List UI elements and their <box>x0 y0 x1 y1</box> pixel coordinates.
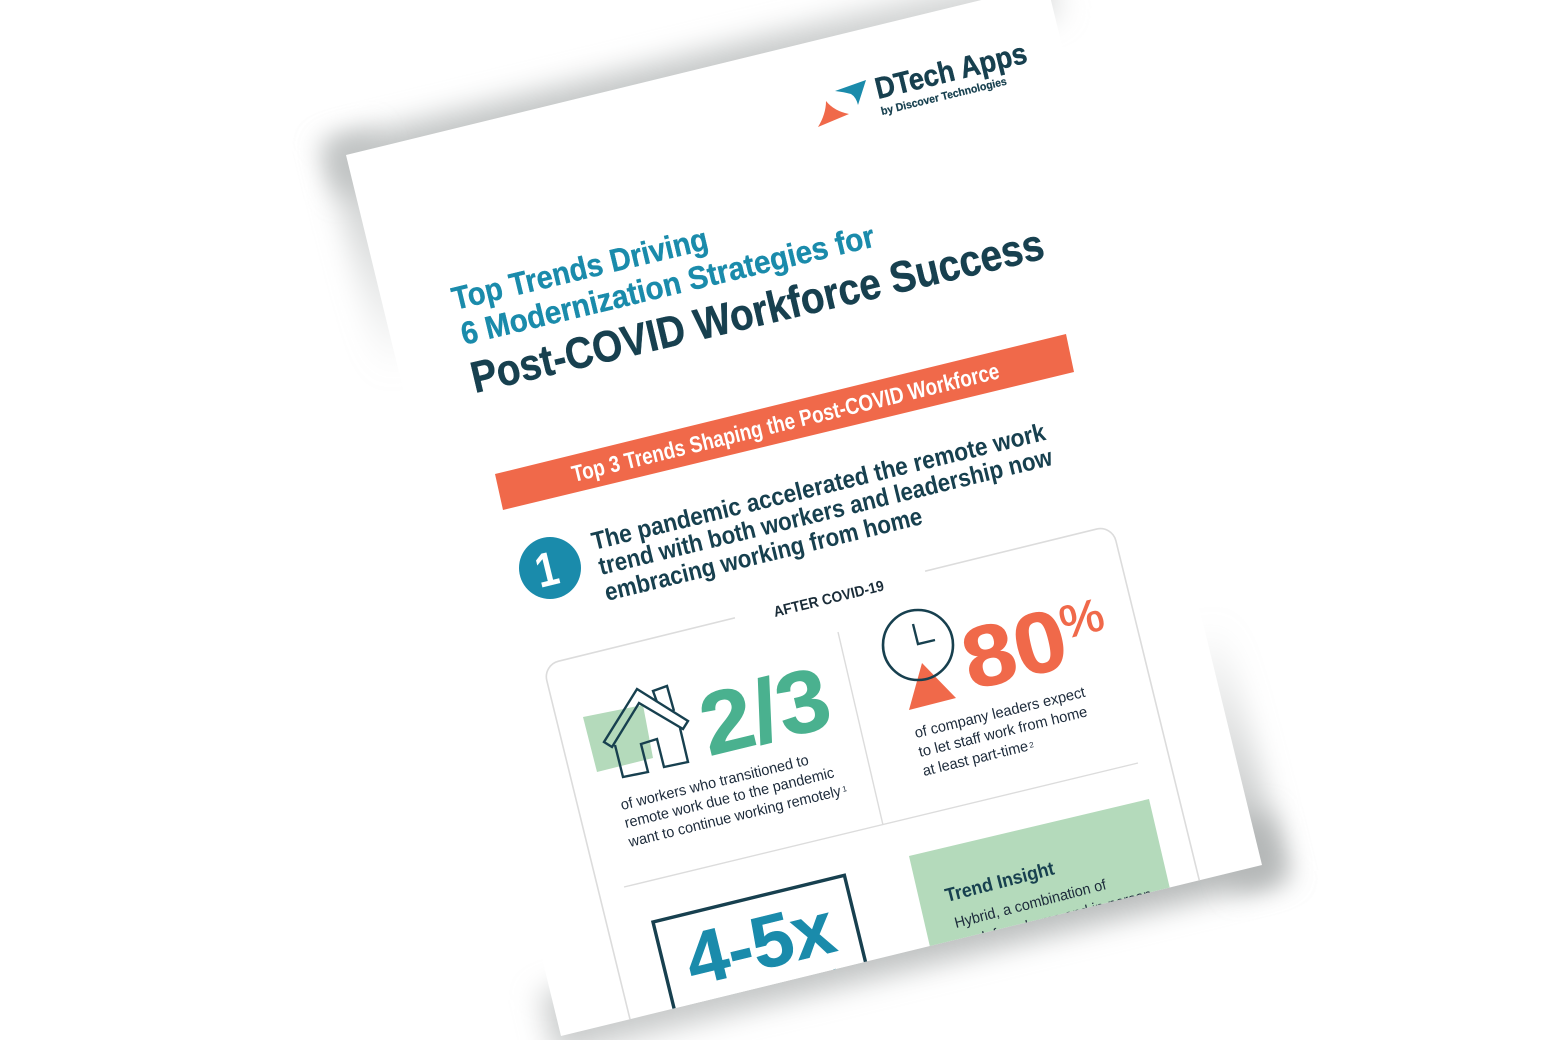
big number 4-5x: 4-5x <box>677 885 843 1002</box>
icon: house on green square <box>583 686 688 777</box>
callout text: Hybrid, a combination of <box>953 876 1109 932</box>
callout: trend insight <box>909 799 1170 946</box>
banner heading: Top 3 Trends Shaping the Post-COVID Workforce <box>569 358 1002 487</box>
big number 80: 80 <box>953 591 1077 708</box>
stat description: 2 <box>1028 740 1035 750</box>
stat description: want to continue working remotely <box>626 783 843 851</box>
stat: eighty percent <box>883 588 1109 780</box>
document sheet <box>346 0 1262 1036</box>
trend statement: The pandemic accelerated the remote work <box>589 418 1048 556</box>
title <box>450 229 1044 393</box>
stat: two thirds <box>583 670 847 846</box>
percent sign: % <box>1054 588 1109 649</box>
stat description: to let staff work from home <box>917 703 1089 761</box>
big number 2/3: 2/3 <box>690 647 840 774</box>
icon: logo orange arrow <box>818 101 849 127</box>
stat description: remote work due to the pandemic <box>623 764 836 832</box>
stat description: of company leaders expect <box>913 684 1088 742</box>
icon: clock with triangle <box>883 610 956 710</box>
trend statement: embracing working from home <box>602 502 925 607</box>
stat description: of workers who transitioned to <box>619 752 810 814</box>
logo: DTech Apps <box>818 48 1027 127</box>
icon: logo teal arrow <box>835 80 866 105</box>
sheet content clipped to page <box>448 37 1255 1040</box>
logo tagline: by Discover Technologies <box>880 76 1008 118</box>
panel outline <box>546 528 1200 1020</box>
stat description <box>915 688 1087 776</box>
number badge <box>519 537 581 599</box>
stat description: at least part-time <box>921 738 1030 780</box>
trend statement: trend with both workers and leadership now <box>596 443 1056 581</box>
number badge: 1 <box>530 542 564 599</box>
sheet drop shadows <box>325 0 1286 1040</box>
stat description: 1 <box>841 784 848 794</box>
title line 2: 6 Modernization Strategies for <box>457 218 878 352</box>
logo wordmark: DTech Apps <box>872 37 1030 106</box>
stat box: 4-5x <box>651 873 868 1009</box>
callout heading: Trend Insight <box>943 858 1057 907</box>
section banner <box>495 334 1074 510</box>
trend 1 heading <box>519 418 1056 607</box>
panel heading: AFTER COVID-19 <box>772 578 886 621</box>
stat caption, cut off by page edge: remote and <box>739 965 843 1015</box>
panel: after COVID-19 <box>546 528 1200 1020</box>
title line 1: Top Trends Driving <box>448 221 711 317</box>
title line 3: Post-COVID Workforce Success <box>466 220 1049 403</box>
callout text: work from home and in-person <box>957 886 1154 952</box>
